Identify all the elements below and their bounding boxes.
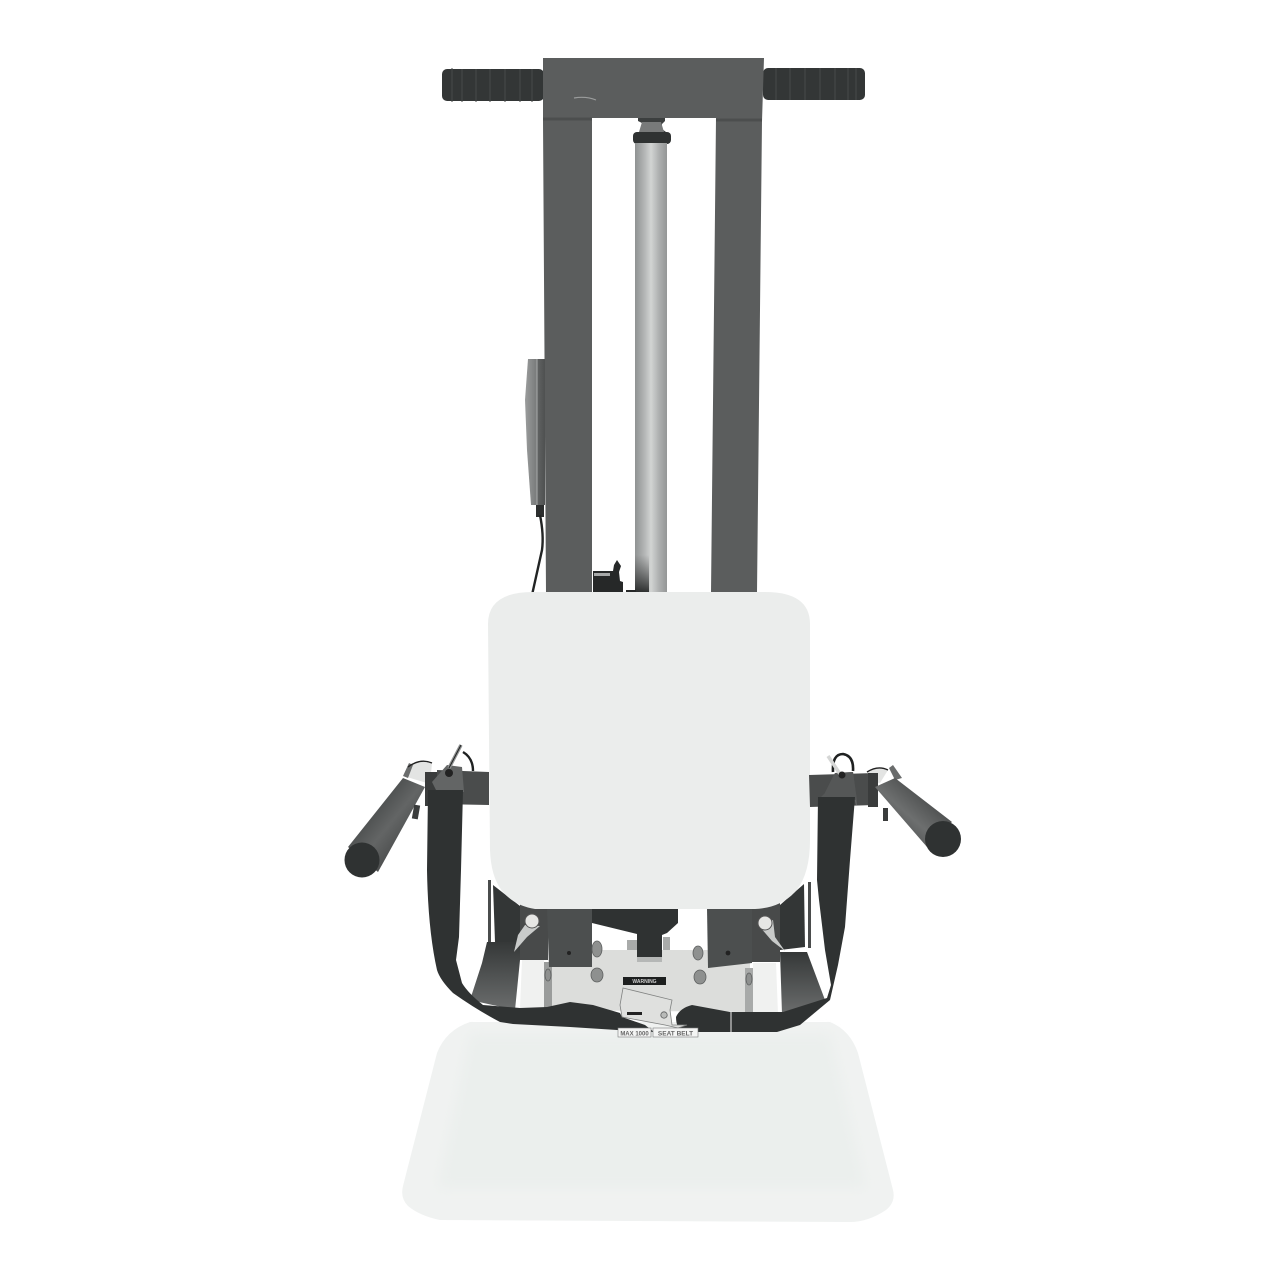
buckle button slot [627, 1012, 642, 1015]
right post side strip [745, 968, 753, 1012]
left strap bracket [432, 745, 473, 792]
left side bracket [488, 880, 520, 942]
actuator column [633, 118, 671, 593]
right arm bar [809, 773, 875, 807]
left push handle grip [442, 68, 544, 102]
frame scuff mark [574, 97, 596, 100]
hand controller [525, 359, 545, 595]
frame top bar shading [543, 119, 762, 120]
right seat post outer [752, 902, 780, 962]
left side plate [470, 942, 520, 1010]
plate bolts [545, 941, 752, 985]
right side bracket [780, 882, 811, 950]
left arm bar [437, 770, 489, 805]
seat belt left strap and lap run [427, 790, 654, 1032]
warning label [623, 977, 666, 985]
base plate [548, 950, 750, 1012]
buckle rivet [661, 1012, 667, 1018]
left seat post outer [520, 904, 548, 960]
right strap bracket [818, 754, 857, 805]
seat belt tag [618, 1028, 698, 1037]
buckle latch plate [620, 988, 687, 1028]
left wing nut [514, 914, 540, 952]
left white rail [520, 960, 544, 1008]
motor housing [593, 560, 636, 593]
upright frame [543, 58, 764, 593]
belt seam [730, 1012, 732, 1032]
right wing nut [758, 916, 785, 951]
right grip bar [867, 765, 961, 857]
seat belt tag: SEAT BELT [658, 1030, 693, 1037]
footplate [402, 1022, 894, 1222]
warning label: WARNING [632, 979, 657, 985]
footplate inner surface [438, 1034, 866, 1188]
actuator motor body [590, 908, 678, 962]
seat belt tag: MAX 1000 [620, 1031, 649, 1037]
left post side strip [544, 962, 552, 1008]
seat belt right strap and lap run [676, 797, 855, 1032]
backrest panel [488, 592, 810, 909]
controller cable [532, 515, 543, 595]
right push handle grip [763, 68, 865, 100]
post screw dots [567, 951, 730, 955]
right side plate [780, 952, 825, 1014]
right white rail [753, 963, 778, 1014]
left seat post inner [547, 908, 592, 967]
left grip bar [344, 761, 437, 878]
right seat post inner [707, 908, 752, 968]
